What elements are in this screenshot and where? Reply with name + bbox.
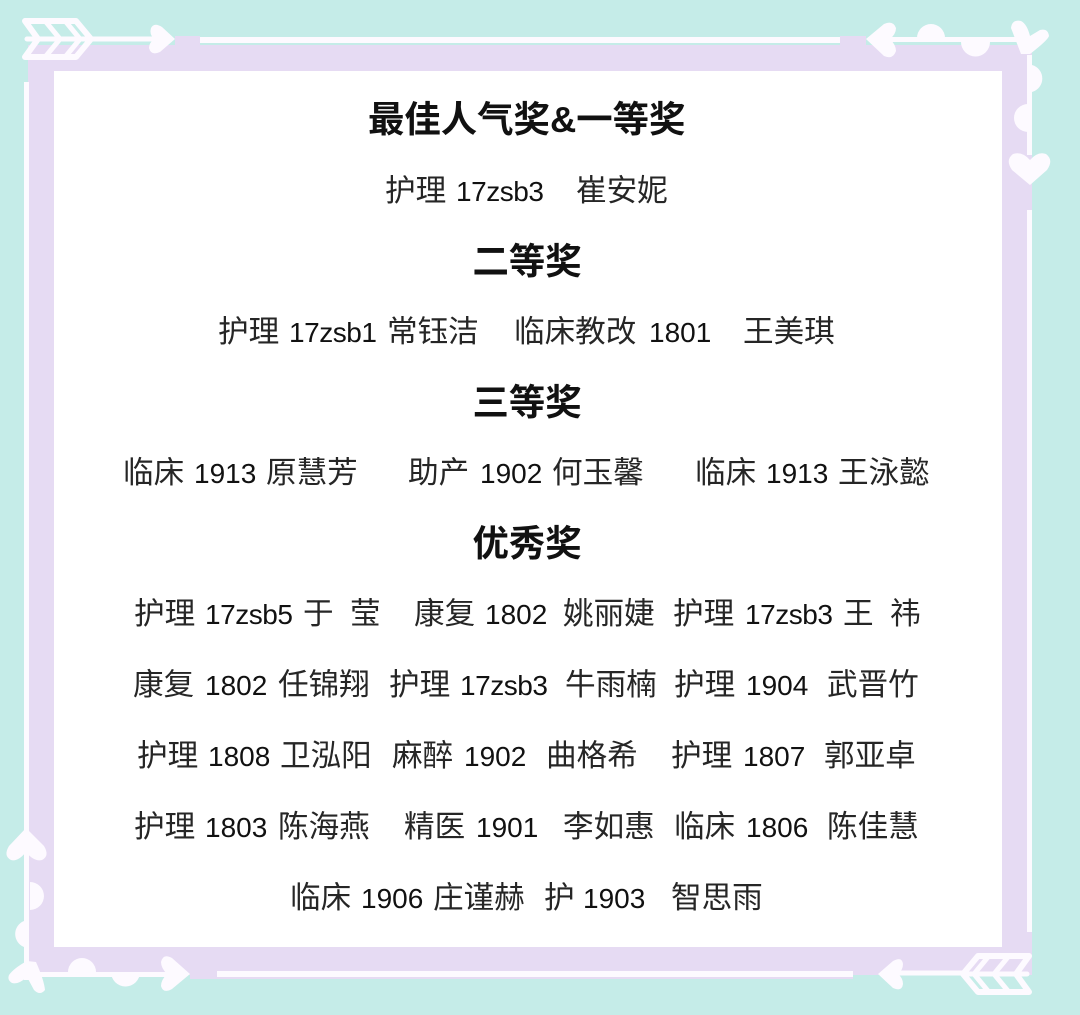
winner list: excellence prize: 1808 (208, 741, 270, 772)
winner line: second prize (218, 315, 835, 349)
winner line: third prize: 1913 (766, 458, 828, 489)
winner line: third prize: 助产 (408, 456, 469, 490)
winner line: second prize: 17zsb1 (289, 317, 377, 348)
winner line: second prize: 护理 (218, 315, 279, 349)
winner list: excellence prize: 庄谨赫 (433, 881, 525, 915)
winner list: excellence prize: 临床 (290, 881, 351, 915)
winner line: third prize: 王泳懿 (838, 456, 930, 490)
winner list: excellence prize: 1803 (205, 812, 267, 843)
winner list: excellence prize: 于 (303, 597, 334, 631)
winner list: excellence prize: 陈佳慧 (827, 810, 919, 844)
icon: bottom-right arrow (878, 956, 1029, 992)
winner list: excellence prize: 郭亚卓 (824, 739, 916, 773)
winner list: excellence prize: 护理 (134, 597, 195, 631)
winner line: second prize: 1801 (649, 317, 711, 348)
winner line: second prize: 临床教改 (514, 315, 636, 349)
icon: right side arrow with dots (1009, 65, 1050, 185)
winner list: excellence prize: 1901 (476, 812, 538, 843)
winner line: third prize: 1902 (480, 458, 542, 489)
winner list: excellence prize: 1906 (361, 883, 423, 914)
winner list: excellence prize: 17zsb3 (745, 599, 833, 630)
winner line: top award: 护理 (385, 174, 446, 208)
winner list: excellence prize: 康复 (133, 668, 194, 702)
winner list: excellence prize: 麻醉 (392, 739, 453, 773)
winner list: excellence prize: 护理 (671, 739, 732, 773)
winner line: third prize: 1913 (194, 458, 256, 489)
winner line: third prize: 临床 (123, 456, 184, 490)
winner list: excellence prize: 护理 (134, 810, 195, 844)
winner list: excellence prize: 护 (544, 881, 575, 915)
winner list: excellence prize: 17zsb5 (205, 599, 293, 630)
winner line: second prize: 王美琪 (743, 315, 835, 349)
winner list: excellence prize: 护理 (673, 597, 734, 631)
winner line: third prize: 何玉馨 (552, 456, 644, 490)
winner list: excellence prize: 王 (843, 597, 874, 631)
winner line: third prize: 临床 (695, 456, 756, 490)
winner list: excellence prize: 1806 (746, 812, 808, 843)
heading: second prize: 二等奖 (472, 241, 582, 282)
winner list: excellence prize: 康复 (414, 597, 475, 631)
winner line: top award (385, 174, 668, 208)
winner list: excellence prize: 1802 (205, 670, 267, 701)
icon: top-left arrow (25, 21, 175, 57)
heading: top award: 最佳人气奖&一等奖 (368, 99, 685, 140)
winner list: excellence prize: 陈海燕 (278, 810, 370, 844)
winner list: excellence prize: 护理 (674, 668, 735, 702)
winner line: top award: 17zsb3 (456, 176, 544, 207)
winner list: excellence prize: 姚丽婕 (563, 597, 655, 631)
winner list: excellence prize: 1802 (485, 599, 547, 630)
winner list: excellence prize: 莹 (350, 597, 381, 631)
winner list: excellence prize: 精医 (404, 810, 465, 844)
winner list: excellence prize: 祎 (890, 597, 921, 631)
winner list: excellence prize: 任锦翔 (278, 668, 370, 702)
winner line: second prize: 常钰洁 (387, 315, 479, 349)
winner list: excellence prize: 1902 (464, 741, 526, 772)
winner list: excellence prize: 1904 (746, 670, 808, 701)
winner list: excellence prize: 1807 (743, 741, 805, 772)
winner list: excellence prize: 护理 (389, 668, 450, 702)
winner list: excellence prize: 17zsb3 (460, 670, 548, 701)
winner list: excellence prize: 李如惠 (563, 810, 655, 844)
winner list: excellence prize (133, 597, 921, 915)
winner line: top award: 崔安妮 (576, 174, 668, 208)
winner list: excellence prize: 牛雨楠 (565, 668, 657, 702)
winner list: excellence prize: 临床 (674, 810, 735, 844)
winner list: excellence prize: 护理 (137, 739, 198, 773)
icon: bottom-left arrow with dots (6, 828, 190, 993)
heading: third prize: 三等奖 (472, 382, 582, 423)
winner list: excellence prize: 曲格希 (546, 739, 638, 773)
heading: excellence prize: 优秀奖 (472, 523, 582, 564)
icon: top-right arrow with dots (866, 21, 1049, 57)
winner list: excellence prize: 武晋竹 (827, 668, 919, 702)
winner list: excellence prize: 智思雨 (671, 881, 763, 915)
panel: white card (54, 71, 1002, 947)
winner line: third prize (123, 456, 930, 490)
winner line: third prize: 原慧芳 (266, 456, 358, 490)
winner list: excellence prize: 1903 (583, 883, 645, 914)
winner list: excellence prize: 卫泓阳 (280, 739, 372, 773)
